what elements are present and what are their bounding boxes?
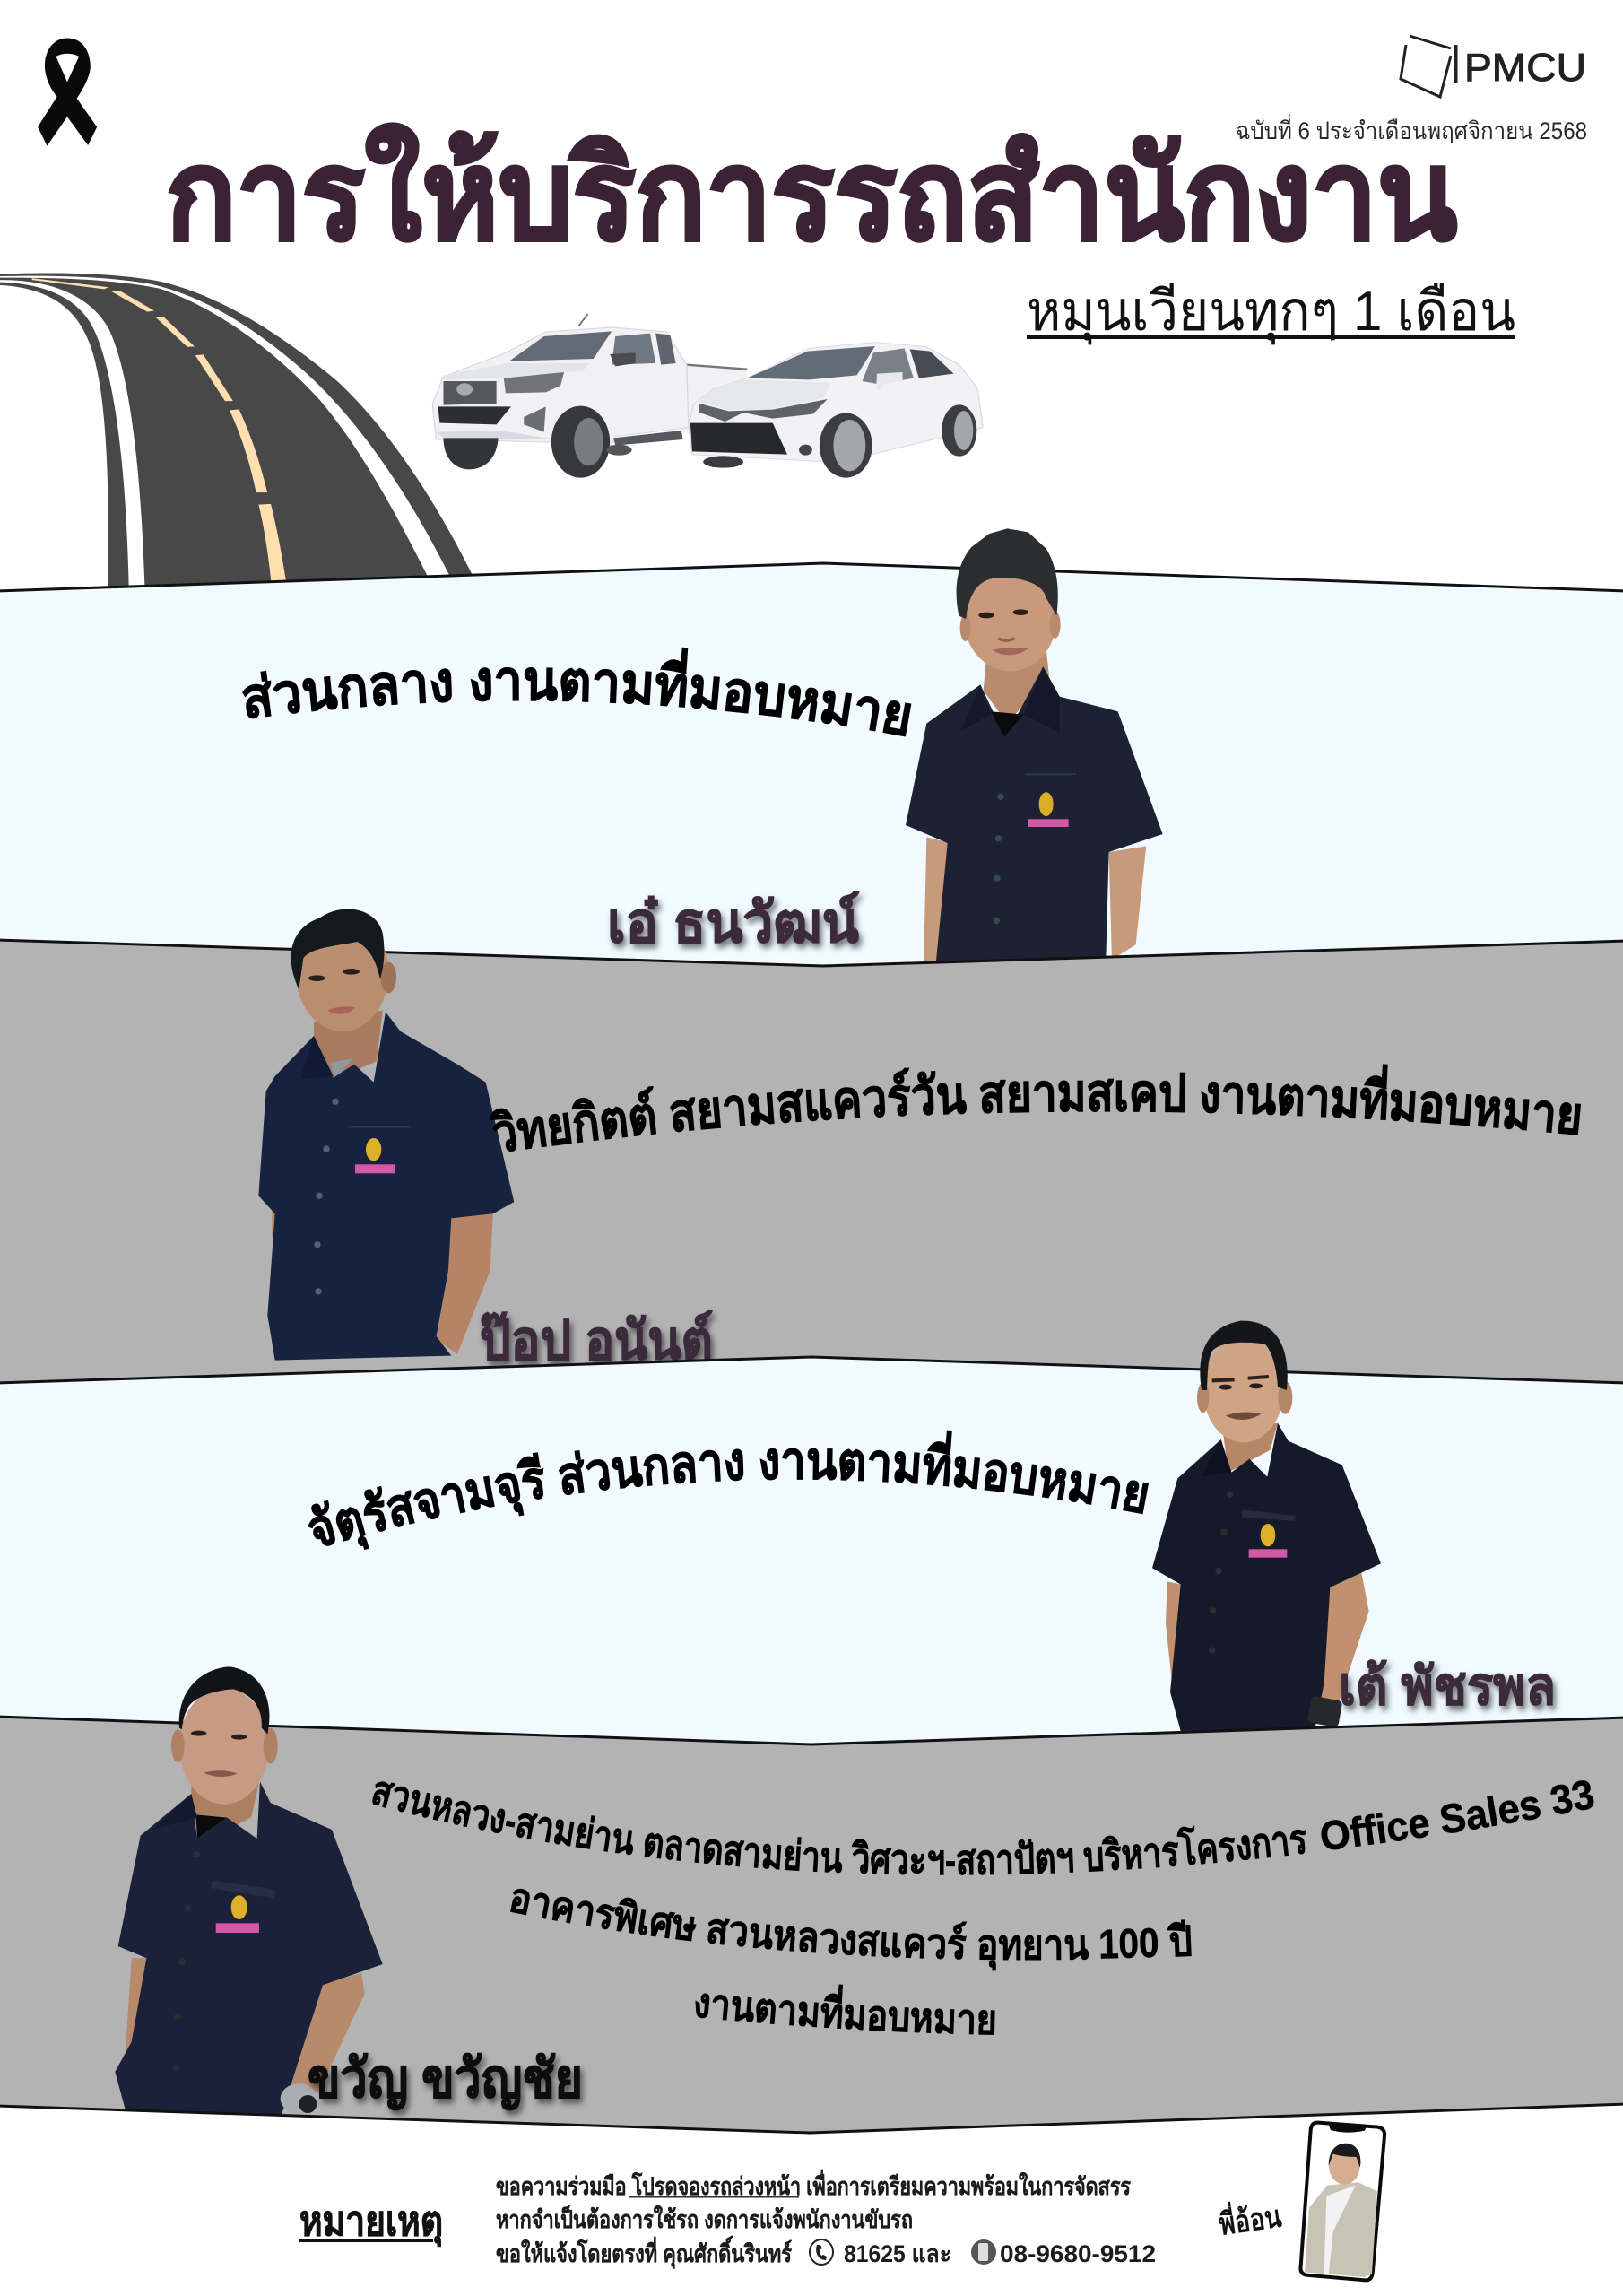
illustration: white pickup truck and sedan xyxy=(432,314,983,478)
footer note text xyxy=(496,2169,1156,2269)
footer note text: 81625 และ xyxy=(844,2240,951,2267)
footer heading: note: หมายเหตุ xyxy=(299,2197,443,2247)
name: Pop Anan: ป๊อป อนันต์ xyxy=(480,1310,713,1370)
footer note text: ขอให้แจ้งโดยตรงที่ คุณศักดิ์นรินทร์ xyxy=(496,2236,792,2269)
text: route, Suan Luang line 3: งานตามที่มอบหมาย xyxy=(695,1984,995,2035)
issue date line: ฉบับที่ 6 ประจำเดือนพฤศจิกายน 2568 xyxy=(1236,114,1587,144)
illustration: phone with contact photo xyxy=(1300,2123,1384,2280)
panel: footer xyxy=(0,2104,1623,2296)
logo: PMCU: PMCU xyxy=(1464,46,1586,90)
panel: band 1, light blue xyxy=(0,563,1623,1004)
text: route, Suan Luang line 1: สวนหลวง-สามย่าน ตลาดสามย่าน วิศวะฯ-สถาปัตฯ บริหารโครงการ xyxy=(372,1781,1306,1875)
panel: band 4, gray xyxy=(0,1717,1623,2152)
icon: telephone xyxy=(810,2239,833,2265)
panel: band 3, light blue xyxy=(0,1357,1623,1794)
name: Khwan Khwanchai: ขวัญ ขวัญชัย xyxy=(308,2048,583,2110)
icon: mobile phone xyxy=(971,2239,996,2265)
person: driver Te xyxy=(1152,1321,1381,1731)
contact name: พี่อ้อน xyxy=(1216,2195,1283,2242)
name: Te Patcharapol: เต้ พัชรพล xyxy=(1339,1657,1556,1716)
text: route, Witthayakit and Siam: วิทยกิตต์ สยามสแควร์วัน สยามสเคป งานตามที่มอบหมาย xyxy=(490,1064,1582,1152)
person: driver Ae xyxy=(906,528,1163,967)
person: driver Pop xyxy=(258,909,514,1361)
pickup xyxy=(432,314,747,478)
contact photo inside phone xyxy=(1305,2144,1377,2277)
sedan xyxy=(689,343,983,478)
panel: band 2, gray xyxy=(0,940,1623,1435)
footer note text: หากจำเป็นต้องการใช้รถ งดการแจ้งพนักงานขับรถ xyxy=(496,2204,913,2233)
text: route, Suan Luang line 1 xyxy=(372,1780,1594,1875)
text: route, Chamchuri Square: จัตุรัสจามจุรี ส่วนกลาง งานตามที่มอบหมาย xyxy=(308,1430,1149,1550)
text: route, Suan Luang line 1: Office Sales 33 xyxy=(1321,1780,1594,1849)
logo: PMCU xyxy=(1401,36,1586,97)
illustration: road xyxy=(0,274,473,596)
subtitle: rotates every month: หมุนเวียนทุกๆ 1 เดือน xyxy=(1027,281,1515,344)
footer note text: 08-9680-9512 xyxy=(1000,2240,1156,2267)
title: การให้บริการรถสำนักงาน xyxy=(166,124,1457,265)
person: driver Khwan xyxy=(115,1666,383,2117)
name: Ae Thanawat: เอ๋ ธนวัฒน์ xyxy=(607,891,860,954)
text: route, central: ส่วนกลาง งานตามที่มอบหมาย xyxy=(242,648,911,737)
text: route, Suan Luang line 2: อาคารพิเศษ สวนหลวงสแควร์ อุทยาน 100 ปี xyxy=(510,1889,1192,1971)
footer note text: ขอความร่วมมือ โปรดจองรถล่วงหน้า เพื่อการเตรียมความพร้อมในการจัดสรร xyxy=(496,2169,1131,2200)
icon: black mourning ribbon xyxy=(38,38,97,146)
